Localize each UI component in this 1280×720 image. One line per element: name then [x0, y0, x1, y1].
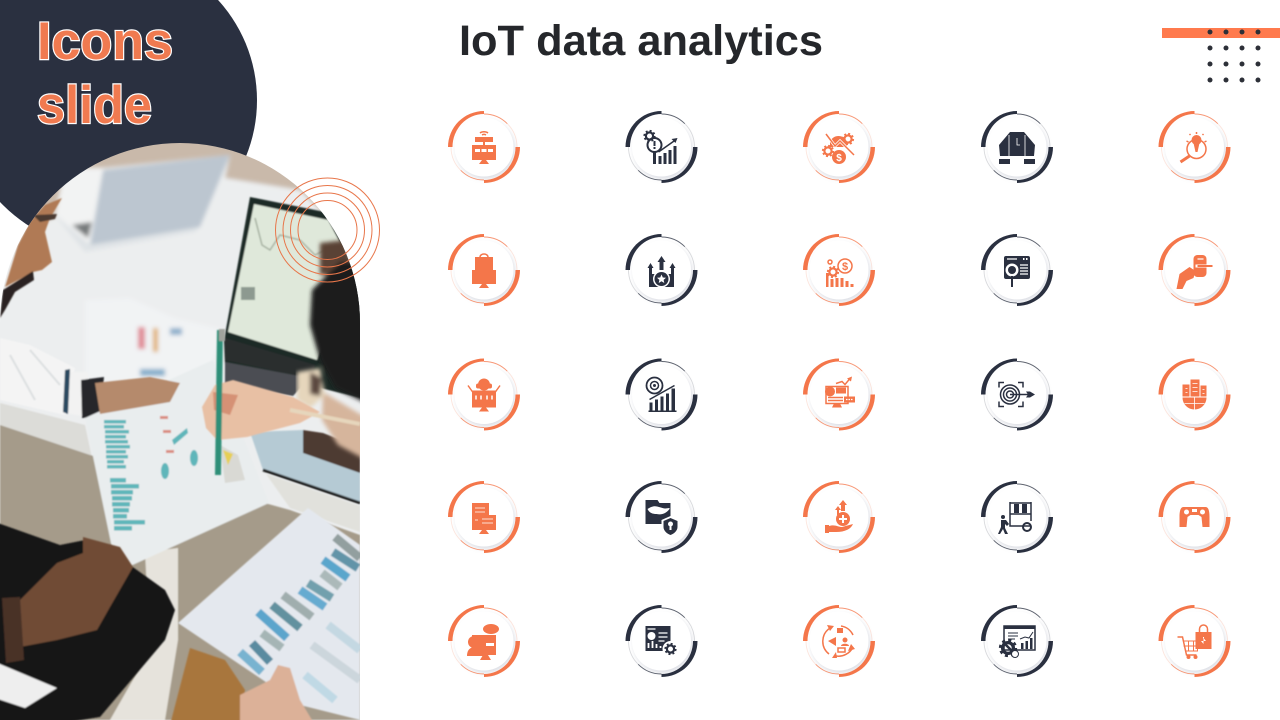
slide label: Icons slide: Icons — [37, 12, 173, 71]
icon: gear, dollar and declining bars: $ — [842, 261, 848, 273]
icon: browser analytics with wrench gear — [981, 605, 1053, 677]
icon: robot on monitor with arrows — [448, 358, 520, 430]
icon: target with dart — [981, 358, 1053, 430]
icon: dashboard with gear — [626, 605, 698, 677]
icon: chatbot at monitor — [448, 605, 520, 677]
icon: warehouse worker with cart — [981, 481, 1053, 553]
dark blob background — [0, 0, 257, 249]
icon: hand with smart device — [1158, 234, 1230, 306]
photo: people reviewing charts — [0, 133, 370, 720]
icon: radar with rising chart — [626, 358, 698, 430]
icon: connected server monitor — [448, 111, 520, 183]
icon: shopping cart and bag — [1158, 605, 1230, 677]
title: IoT data analytics — [459, 17, 823, 65]
slide label: Icons slide — [37, 12, 173, 135]
slide label: Icons slide: slide — [37, 76, 152, 135]
icon: bulb under magnifier — [1158, 111, 1230, 183]
icon: gear, dollar and declining bars — [803, 234, 875, 306]
concentric circles — [276, 178, 380, 282]
icon: hands holding clock box — [981, 111, 1053, 183]
icon: user profile on monitor — [803, 358, 875, 430]
icon: city on globe — [1158, 358, 1230, 430]
icon: solid device monitor — [448, 234, 520, 306]
top-right accent bar and dots — [1162, 28, 1280, 82]
icon: gamepad in hands — [1158, 481, 1230, 553]
icon: secure folder with shield — [626, 481, 698, 553]
icon: gears, hard hat and falling dollar: $ — [836, 153, 842, 164]
icon: browser with magnifier — [981, 234, 1053, 306]
icon: marketing cycle — [803, 605, 875, 677]
icon: document on monitor — [448, 481, 520, 553]
icon: gears, hard hat and falling dollar — [803, 111, 875, 183]
icon: risk magnifier and growth chart — [626, 111, 698, 183]
icon: star badge with upward arrows — [626, 234, 698, 306]
icon: hand with plus and arrows — [803, 481, 875, 553]
